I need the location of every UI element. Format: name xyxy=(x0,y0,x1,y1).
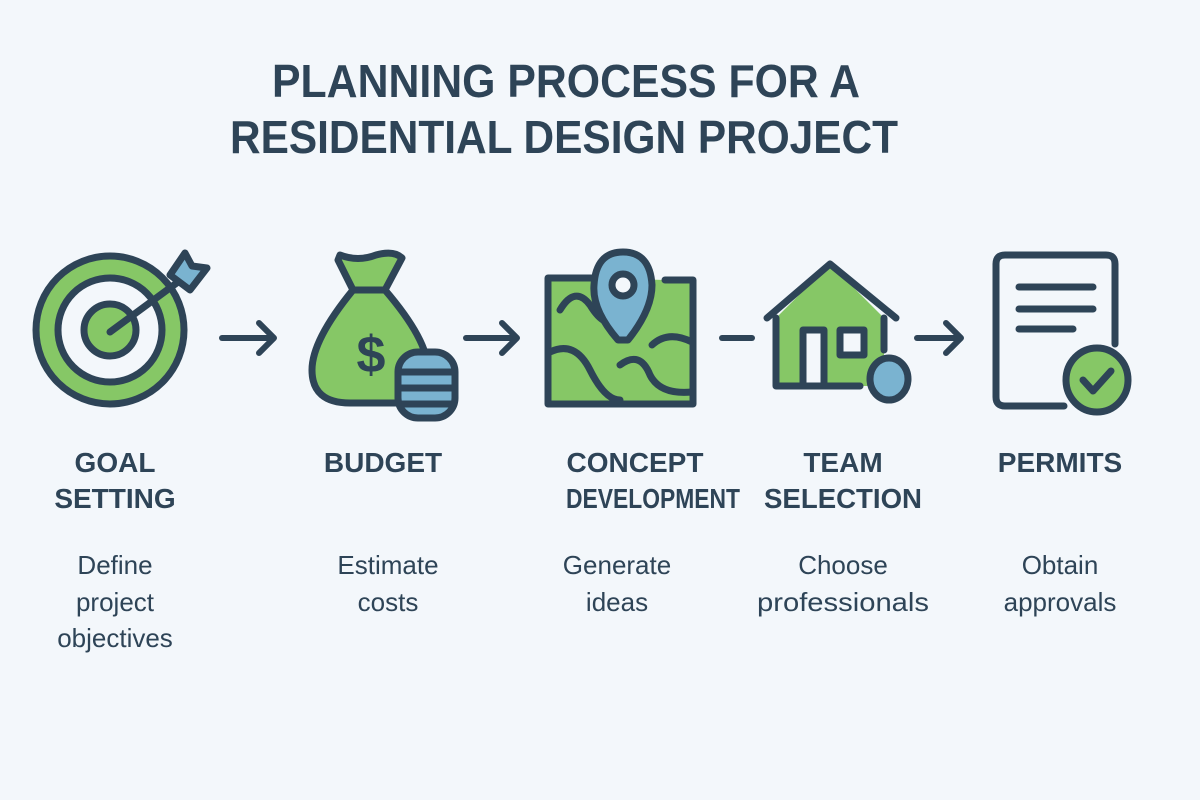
step 1 label: project xyxy=(76,587,155,617)
step 1 label: GOAL xyxy=(75,447,155,478)
icon: house xyxy=(767,264,908,400)
step 5 label: PERMITS xyxy=(998,447,1122,478)
icon: map with pin xyxy=(548,252,693,404)
step 2 label xyxy=(324,447,442,617)
step 3 label xyxy=(563,447,740,617)
icon: document with check xyxy=(996,255,1128,412)
icon: money bag xyxy=(312,253,455,418)
step 5 label xyxy=(998,447,1122,617)
step 5 label: Obtain xyxy=(1022,550,1098,580)
title: RESIDENTIAL DESIGN PROJECT xyxy=(230,111,898,163)
step 2 label: Estimate xyxy=(337,550,439,580)
step 4 label xyxy=(757,447,929,617)
arrow 2 xyxy=(466,323,517,353)
step 3 label: ideas xyxy=(586,587,648,617)
step 4 label: Choose xyxy=(798,550,888,580)
step 2 label: costs xyxy=(358,587,418,617)
step 4 label: TEAM xyxy=(803,447,883,478)
arrow 3 xyxy=(917,323,961,353)
step 1 label xyxy=(54,447,176,653)
icon: target xyxy=(36,253,207,404)
step 1 label: Define xyxy=(77,550,153,580)
title xyxy=(230,55,898,163)
title: PLANNING PROCESS FOR A xyxy=(272,55,860,107)
step 2 label: BUDGET xyxy=(324,447,442,478)
connector dash xyxy=(722,335,752,341)
step 3 label: CONCEPT xyxy=(567,447,703,478)
step 5 label: approvals xyxy=(1004,587,1116,617)
step 3 label: Generate xyxy=(563,550,671,580)
step 1 label: SETTING xyxy=(54,483,176,514)
arrow 1 xyxy=(222,323,274,353)
step 1 label: objectives xyxy=(57,623,173,653)
step 4 label: SELECTION xyxy=(764,483,922,514)
step 4 label: professionals xyxy=(757,587,929,617)
step 3 label: DEVELOPMENT xyxy=(566,483,740,514)
icon: money bag: $ xyxy=(357,326,386,384)
